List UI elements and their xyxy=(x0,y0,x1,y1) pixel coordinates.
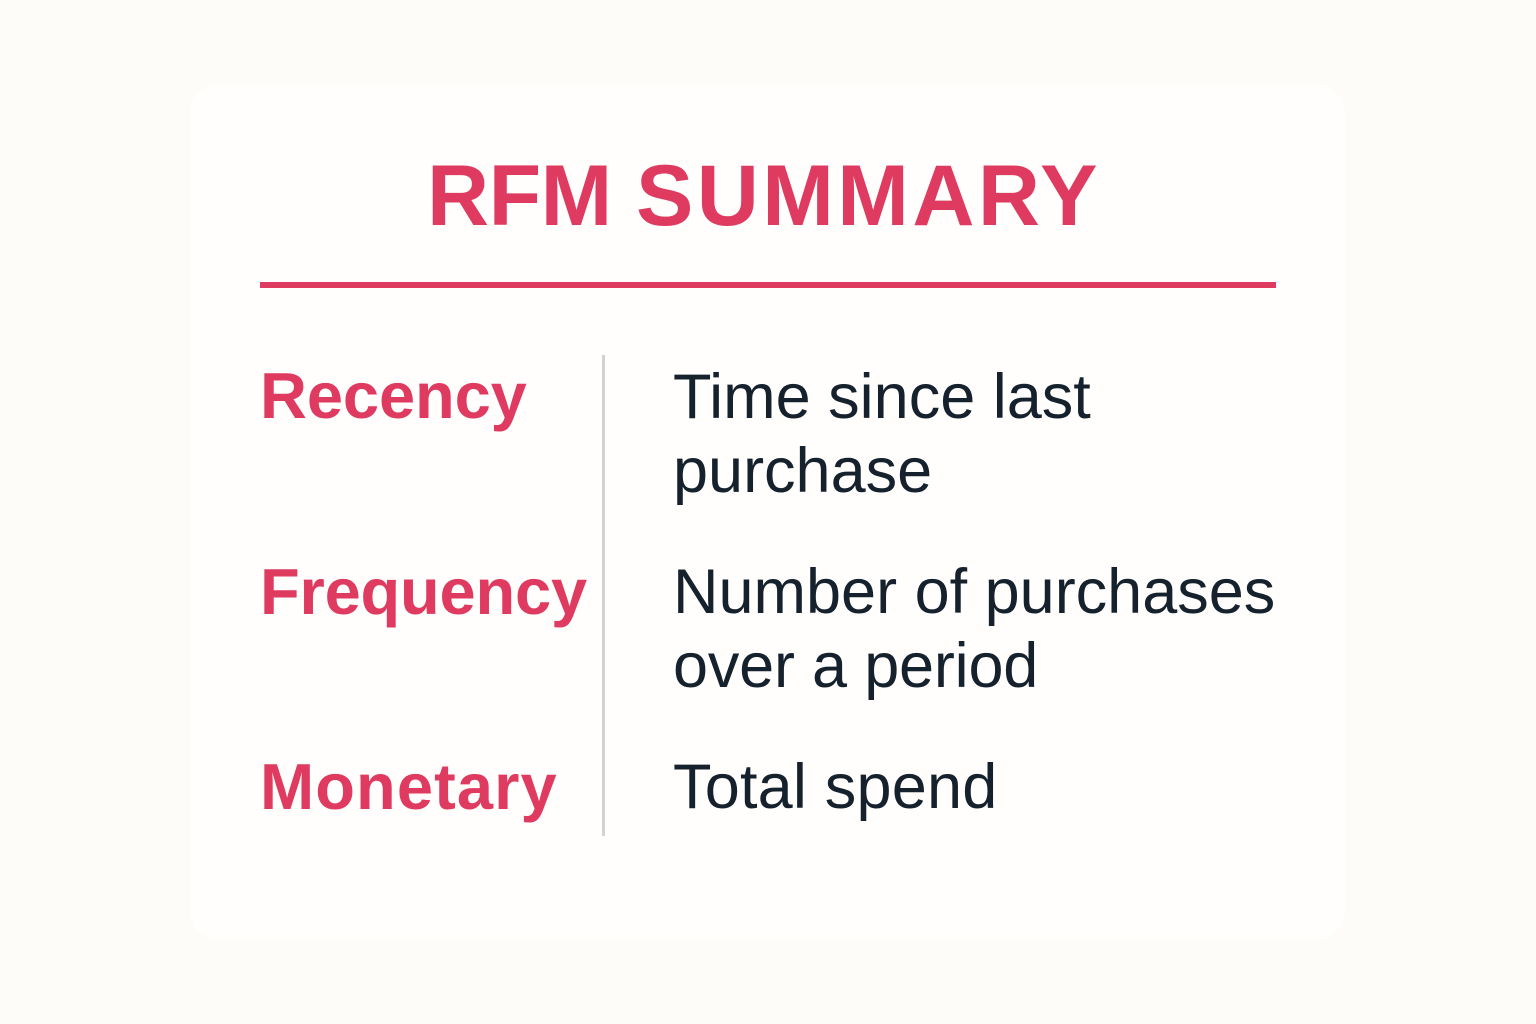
description: Recency: Time since last xyxy=(673,362,1091,432)
label: Monetary: Monetary xyxy=(260,750,558,823)
label: Recency: Recency xyxy=(260,359,527,432)
title rule xyxy=(260,282,1276,288)
title: RFM xyxy=(427,148,612,244)
description: Frequency line 2: over a period xyxy=(673,631,1038,701)
panel: summary card xyxy=(190,84,1345,940)
column divider xyxy=(602,355,605,836)
description: Frequency: Number of purchases xyxy=(673,557,1275,627)
title xyxy=(427,148,1101,244)
description: Recency line 2: purchase xyxy=(673,436,932,506)
label: Frequency: Frequency xyxy=(260,555,587,628)
title: SUMMARY xyxy=(636,148,1101,244)
description: Monetary: Total spend xyxy=(673,752,997,822)
